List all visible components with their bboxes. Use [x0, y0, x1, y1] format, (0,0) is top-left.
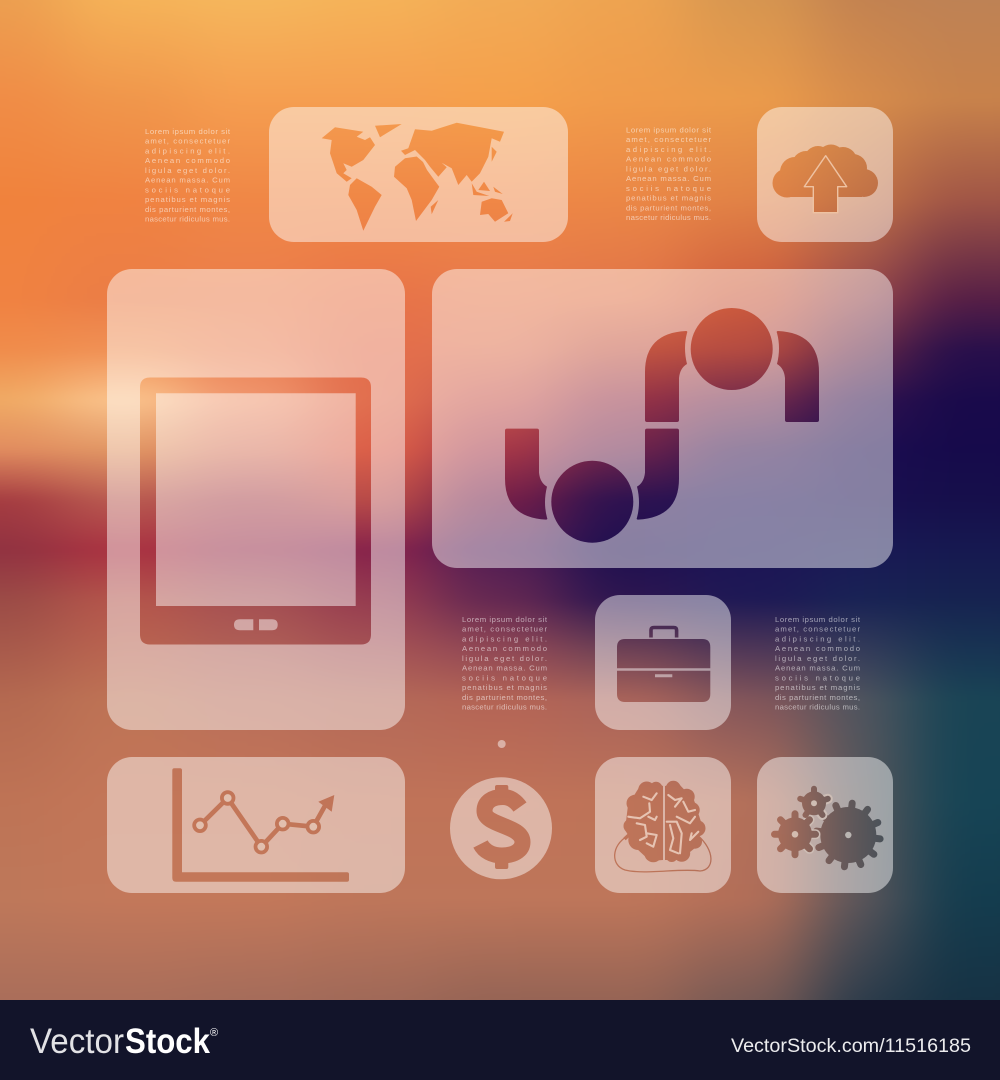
text block: middle: Aenean commodo: [462, 644, 547, 653]
panel: gears: [757, 757, 893, 893]
text block: right: nascetur ridiculus mus.: [775, 703, 860, 712]
text block: top right: Lorem ipsum dolor sit: [626, 126, 712, 134]
footer bar: [0, 1000, 1000, 1080]
text block: top left: penatibus et magnis: [145, 195, 230, 204]
icon: upload arrow: [804, 156, 847, 213]
icon: briefcase: [617, 628, 710, 702]
text block: middle: [462, 615, 548, 712]
text block: top right: amet, consectetuer: [626, 135, 711, 144]
panel: brain: [595, 757, 731, 893]
text block: top right: Aenean massa. Cum: [626, 174, 711, 183]
text block: top left: [145, 127, 231, 224]
text block: top right: ligula eget dolor.: [626, 164, 711, 174]
panel: tablet: [107, 269, 405, 730]
text block: top right: nascetur ridiculus mus.: [626, 213, 711, 222]
text block: middle: Aenean massa. Cum: [462, 664, 547, 673]
small dot: [498, 740, 506, 748]
icon: tablet device: [140, 378, 371, 644]
icon: cloud: [772, 144, 878, 198]
panel: two figures: [432, 269, 893, 568]
text block: right: Lorem ipsum dolor sit: [775, 615, 861, 624]
text block: middle: ligula eget dolor.: [462, 654, 547, 663]
footer logo: Vector: [30, 1022, 124, 1061]
text block: right: [775, 615, 861, 712]
text block: right: Aenean massa. Cum: [775, 664, 860, 673]
text block: top left: Aenean massa. Cum: [145, 176, 230, 185]
text block: right: dis parturient montes,: [775, 693, 860, 702]
icon: chart trend line: [194, 792, 334, 852]
text block: top left: dis parturient montes,: [145, 205, 230, 214]
text block: right: ligula eget dolor.: [775, 654, 860, 663]
text block: top left: ligula eget dolor.: [145, 166, 230, 175]
text block: middle: dis parturient montes,: [462, 693, 547, 702]
footer logo: ®: [210, 1027, 218, 1039]
text block: top left: sociis natoque: [145, 186, 230, 194]
icon: cycling figures: [505, 308, 819, 543]
text block: middle: Lorem ipsum dolor sit: [462, 615, 548, 624]
text block: top right: [626, 126, 712, 222]
text block: middle: adipiscing elit.: [462, 634, 547, 644]
panel: cloud upload: [757, 107, 893, 242]
text block: top left: amet, consectetuer: [145, 137, 230, 146]
panel: world map: [269, 107, 568, 242]
text block: right: penatibus et magnis: [775, 683, 860, 692]
icon: dollar coin: [450, 777, 552, 879]
text block: right: amet, consectetuer: [775, 625, 860, 634]
text block: top right: adipiscing elit.: [626, 145, 711, 154]
text block: top left: Lorem ipsum dolor sit: [145, 127, 231, 136]
text block: middle: nascetur ridiculus mus.: [462, 703, 547, 712]
text block: right: sociis natoque: [775, 674, 860, 682]
text block: top right: penatibus et magnis: [626, 194, 711, 203]
text block: middle: sociis natoque: [462, 674, 547, 682]
text block: top right: dis parturient montes,: [626, 204, 711, 212]
panel: line chart: [107, 757, 405, 893]
text block: top left: Aenean commodo: [145, 156, 230, 165]
panel: briefcase: [595, 595, 731, 730]
text block: right: adipiscing elit.: [775, 634, 860, 644]
footer logo: Stock: [125, 1022, 210, 1061]
footer logo: [30, 1022, 218, 1061]
text block: middle: amet, consectetuer: [462, 625, 547, 634]
footer url: VectorStock.com/11516185: [731, 1035, 971, 1057]
icon: brain with cable: [615, 781, 711, 872]
icon: world map: [322, 123, 513, 231]
icon: chart axes: [172, 768, 349, 882]
text block: middle: penatibus et magnis: [462, 683, 547, 692]
text block: top left: adipiscing elit.: [145, 146, 230, 156]
icon: gears: [774, 789, 880, 867]
text block: top left: nascetur ridiculus mus.: [145, 215, 230, 224]
text block: right: Aenean commodo: [775, 644, 860, 653]
text block: top right: sociis natoque: [626, 184, 711, 193]
text block: top right: Aenean commodo: [626, 155, 711, 164]
